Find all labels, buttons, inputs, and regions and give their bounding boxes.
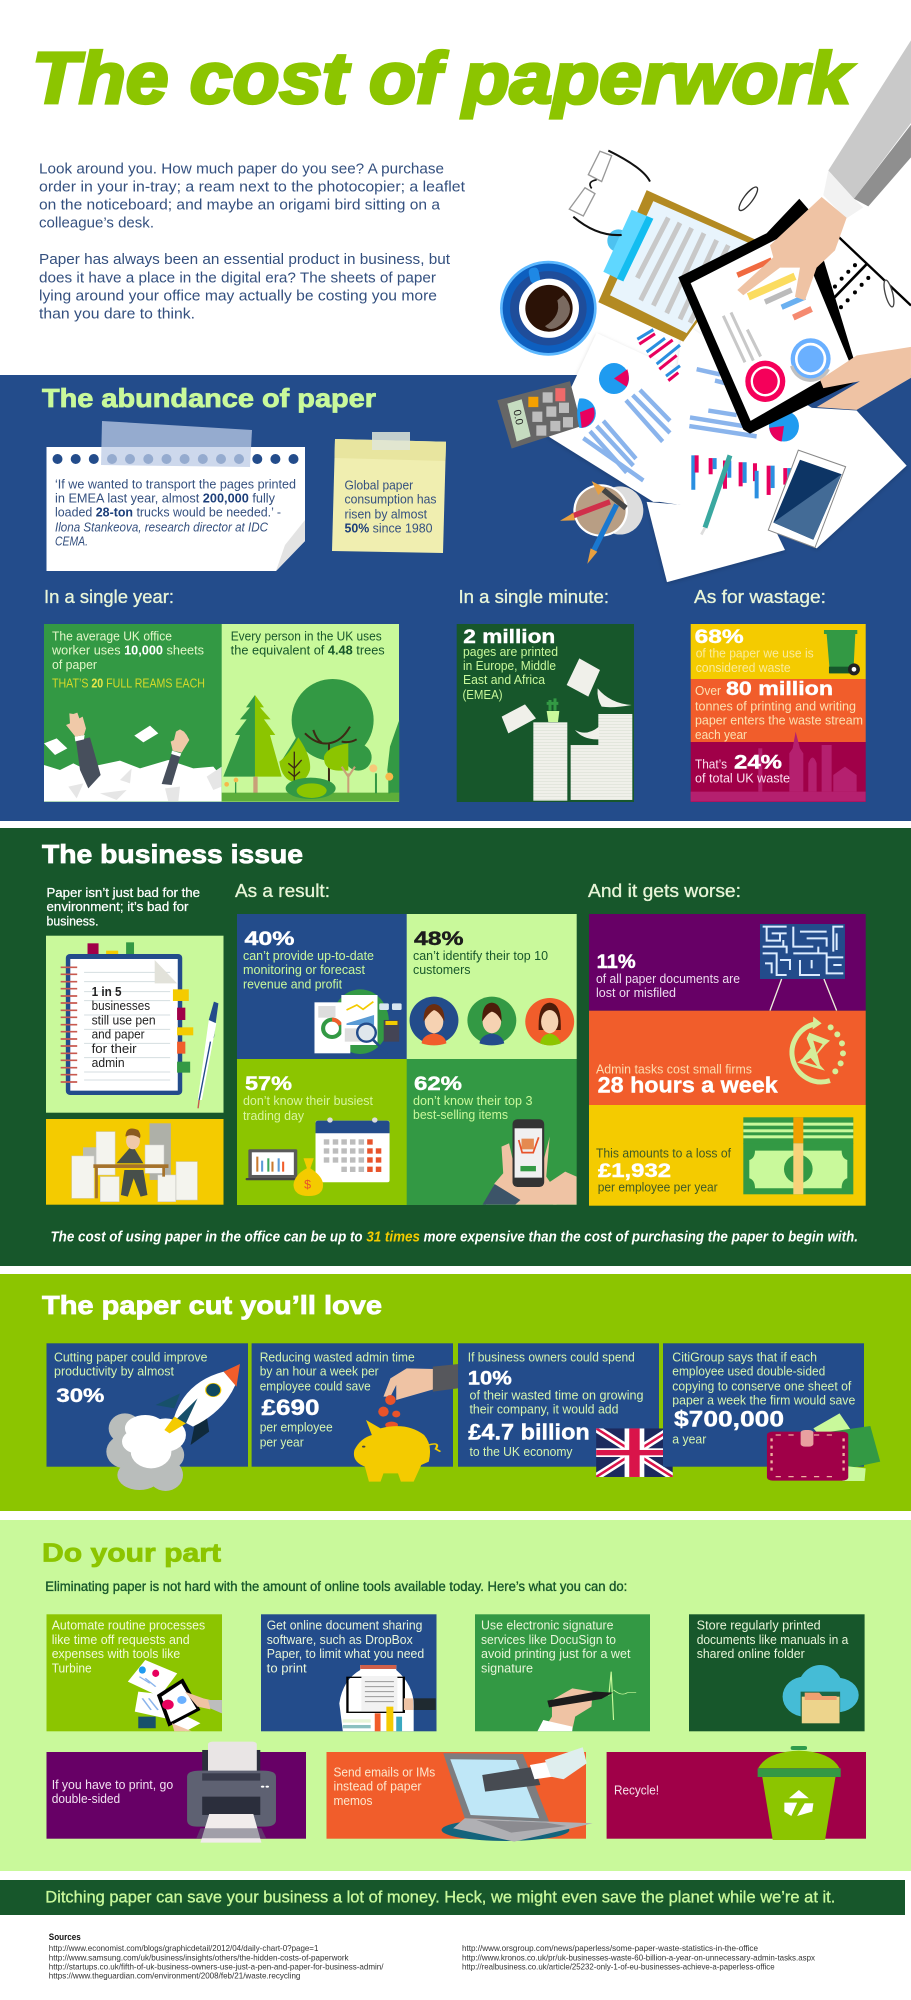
- card text: sheets of paper: worker uses 10,000 sheets: [51, 644, 204, 658]
- panel: admin time card: £690: [262, 1395, 320, 1420]
- icon: banknote bundle: [743, 1117, 853, 1194]
- panel: productivity card: Cutting paper could improve: [54, 1351, 207, 1365]
- panel: automate card: Turbine: [52, 1662, 92, 1676]
- notebook text: [92, 985, 156, 1070]
- banner: closing message: Ditching paper can save your business a lot of money. Heck, we might even save the planet while we’re at it.: [45, 1888, 835, 1907]
- icon: tape: [101, 421, 252, 467]
- panel: CitiGroup card: $700,000: [674, 1407, 784, 1432]
- sources list: Sources: [49, 1932, 81, 1942]
- panel: 62% card: 62%: [414, 1074, 462, 1095]
- panel: shared folder card: documents like manuals in a: [697, 1633, 848, 1647]
- icon: hand dropping coins into piggy bank: [354, 1363, 471, 1482]
- subheading: as a result: As a result:: [235, 881, 330, 901]
- panel: recycle card: Recycle!: [614, 1783, 659, 1797]
- card text: 2 million: in Europe, Middle: [463, 659, 556, 673]
- icon: forest: [222, 679, 399, 802]
- panel: double sided printing card: double-sided: [52, 1792, 120, 1806]
- panel: 57% card: [237, 1059, 407, 1205]
- card text: 2 million: pages are printed: [463, 645, 558, 659]
- panel: CitiGroup card: a year: [672, 1432, 706, 1446]
- sources list: http://www.samsung.com/uk/business/insights/others/the-hidden-costs-of-paperwork: [49, 1952, 349, 1962]
- panel: 11% misfiled card: lost or misfiled: [596, 986, 676, 1000]
- intro text: colleague’s desk.: [39, 215, 154, 232]
- card text: 2 million: [462, 627, 558, 702]
- intro text: does it have a place in the digital era? The sheets of paper: [39, 269, 436, 286]
- icon: hourglass with arrow: [792, 1017, 846, 1082]
- sticky note text: risen by almost: [344, 508, 428, 522]
- panel: 11% misfiled card: of all paper documents are: [596, 972, 740, 986]
- icon: paperclip: [736, 185, 760, 213]
- panel: orange 80 million band: each year: [695, 728, 747, 742]
- panel: 62% card: [407, 1059, 577, 1205]
- card text: 2 million: 2 million: [463, 627, 555, 648]
- panel: productivity card: [46, 1343, 248, 1491]
- card text: 2 million: (EMEA): [462, 688, 502, 702]
- sticky note text: consumption has: [344, 492, 436, 506]
- notebook text: 1 in 5: [92, 985, 122, 999]
- intro text: lying around your office may actually be costing you more: [39, 287, 437, 304]
- callout: 31 times more expensive: The cost of using paper in the office can be up to 31 times more expensive than the cost of purchasing the paper to begin with.: [50, 1230, 858, 1246]
- panel: CitiGroup card: paper a week the firm would save: [672, 1393, 855, 1407]
- icon: clipboard: [598, 190, 757, 342]
- notebook text: businesses: [92, 999, 150, 1013]
- panel: admin time card: Reducing wasted admin time: [260, 1351, 415, 1365]
- panel: double sided printing card: [46, 1742, 306, 1843]
- panel: 11% misfiled card: 11%: [597, 952, 636, 973]
- intro text: on the noticeboard; and maybe an origami bird sitting on a: [39, 197, 441, 214]
- panel: 40% card: 40%: [244, 929, 295, 950]
- panel: document sharing card: Paper, to limit what you need: [267, 1647, 424, 1661]
- heading: the paper cut you'll love: The paper cut you’ll love: [42, 1290, 382, 1320]
- icon: charts and magnifier: [314, 989, 402, 1054]
- panel: business owners card: £4.7 billion: [468, 1419, 590, 1444]
- notebook text: and paper: [92, 1028, 145, 1042]
- panel: 40% card: revenue and profit: [243, 978, 343, 992]
- icon: desk illustration with papers, tablet, coffee and hands: [497, 40, 911, 582]
- title: The cost of paperwork: [32, 39, 855, 119]
- panel: 40% card: [237, 914, 407, 1059]
- card text: sheets of paper: of paper: [52, 658, 97, 672]
- icon: sticky tape: [372, 432, 410, 450]
- icon: printer: [187, 1742, 276, 1843]
- panel: electronic signature card: services like DocuSign to: [481, 1633, 616, 1647]
- panel: admin time card: employee could save: [260, 1380, 371, 1394]
- panel: 11% misfiled card: [589, 914, 866, 1011]
- icon: calendar laptop and money bag: [246, 1117, 390, 1196]
- panel: orange 80 million band: paper enters the waste stream: [695, 714, 863, 728]
- sticky note text: Global paper: [344, 478, 413, 492]
- panel: 48% card: customers: [413, 963, 470, 977]
- panel: sticky note: [332, 432, 446, 553]
- icon: man at desk among paper stacks: [72, 1123, 197, 1202]
- text: bad for business: business.: [46, 914, 98, 928]
- panel: do your part section background: [0, 1520, 911, 1871]
- panel: 57% card: trading day: [243, 1109, 305, 1123]
- sources list: https://www.theguardian.com/environment/2008/feb/21/waste.recycling: [49, 1971, 301, 1981]
- icon: wallet with banknotes: [767, 1413, 880, 1481]
- panel: productivity card: productivity by almost: [54, 1365, 175, 1379]
- panel: electronic signature card: Use electronic signature: [481, 1618, 614, 1632]
- text: bad for business: Paper isn’t just bad for the: [46, 886, 200, 900]
- icon: union jack flag: [596, 1428, 673, 1477]
- quote text: in EMEA last year, almost 200,000 fully: [55, 492, 276, 506]
- panel: document sharing card: Get online document sharing: [267, 1618, 422, 1632]
- card text: trees: the equivalent of 4.48 trees: [231, 644, 385, 658]
- icon: city silhouette: [691, 732, 866, 802]
- subheading: and it gets worse: And it gets worse:: [588, 881, 741, 901]
- icon: smartphone: [768, 450, 846, 548]
- panel: abundance section background: [0, 375, 911, 821]
- sticky note text: 50% since 1980: [344, 522, 433, 536]
- sticky note text: [344, 478, 436, 536]
- icon: person reading document: [339, 1665, 436, 1731]
- heading: do your part: Do your part: [42, 1538, 221, 1568]
- panel: shared folder card: [689, 1614, 865, 1731]
- panel: 2 million pages card: [457, 624, 634, 802]
- icon: note binding holes: [52, 454, 298, 464]
- notebook text: for their: [92, 1042, 137, 1056]
- panel: admin time card: [252, 1343, 471, 1482]
- panel: automate card: [46, 1614, 222, 1731]
- panel: automate card: like time off requests and: [52, 1633, 190, 1647]
- panel: productivity card: 30%: [56, 1386, 105, 1407]
- banner: closing message: [0, 1880, 905, 1915]
- panel: 40% card: can’t provide up-to-date: [243, 949, 374, 963]
- panel: business owners card: [458, 1343, 673, 1477]
- quote text: [55, 478, 296, 548]
- quote text: loaded 28-ton trucks would be needed.’ -: [55, 506, 281, 520]
- icon: notebook with holes: [813, 237, 911, 374]
- panel: emails card: [326, 1747, 593, 1842]
- heading: the abundance of paper: The abundance of paper: [42, 383, 376, 413]
- card text: sheets of paper: THAT’S 20 FULL REAMS EACH: [52, 677, 205, 691]
- panel: 57% card: 57%: [245, 1074, 292, 1095]
- icon: hand signing with stylus: [537, 1672, 636, 1731]
- panel: document sharing card: [261, 1614, 436, 1731]
- panel: document sharing card: software, such as DropBox: [267, 1633, 413, 1647]
- heading: the business issue: The business issue: [42, 839, 303, 869]
- icon: cloud folder: [783, 1665, 859, 1723]
- panel: automate card: Automate routine processes: [52, 1618, 205, 1632]
- panel: orange 80 million band: [691, 679, 866, 742]
- panel: emails card: Send emails or IMs: [334, 1766, 435, 1780]
- icon: calculator: [497, 381, 582, 448]
- intro text: order in your in-tray; a ream next to the photocopier; a leaflet: [39, 179, 466, 196]
- panel: orange 80 million band: tonnes of printing and writing: [695, 700, 856, 714]
- panel: 28 hours card: [589, 1011, 866, 1105]
- panel: 48% card: [407, 914, 577, 1059]
- panel: business owners card: 10%: [468, 1368, 512, 1389]
- panel: paper cut section background: [0, 1274, 911, 1511]
- panel: CitiGroup card: [663, 1343, 880, 1481]
- panel: crimson 24% band: 24%: [734, 752, 782, 773]
- icon: maze on easel: [760, 924, 845, 1011]
- panel: admin time card: per year: [260, 1436, 304, 1450]
- sources list: http://www.orsgroup.com/news/paperless/some-paper-waste-statistics-in-the-office: [462, 1943, 758, 1953]
- icon: hand with phone shopping cart: [483, 1119, 577, 1205]
- panel: shared folder card: Store regularly printed: [697, 1618, 821, 1632]
- icon: lower hand: [817, 347, 911, 410]
- sources list: http://www.kronos.co.uk/pr/uk-businesses-waste-60-billion-a-year-on-unnecessary-admin-tasks.aspx: [462, 1952, 816, 1962]
- icon: sleeve: [823, 40, 911, 219]
- notebook text: still use pen: [92, 1013, 156, 1027]
- panel: business owners card: their company, it would add: [470, 1403, 619, 1417]
- intro text: than you dare to think.: [39, 305, 195, 322]
- panel: automate card: expenses with tools like: [52, 1647, 180, 1661]
- panel: business owners card: If business owners could spend: [468, 1351, 635, 1365]
- panel: CitiGroup card: CitiGroup says that if each: [672, 1351, 817, 1365]
- panel: white header background: [0, 0, 911, 375]
- panel: £1,932 card: This amounts to a loss of: [596, 1146, 732, 1160]
- icon: tablet: [678, 199, 860, 434]
- icon: recycling bin: [758, 1746, 841, 1840]
- panel: overworked worker card: [46, 1119, 224, 1205]
- notebook text: admin: [92, 1056, 125, 1070]
- icon: pencil cup: [560, 481, 643, 564]
- icon: calculator: 0.0: [510, 409, 525, 426]
- sources list: http://startups.co.uk/fifth-of-uk-business-owners-use-just-a-pen-and-paper-for-business-admin/: [49, 1961, 384, 1971]
- panel: business owners card: of their wasted time on growing: [470, 1388, 644, 1402]
- icon: green wheelie bin: [824, 630, 860, 675]
- quote text: CEMA.: [55, 534, 88, 548]
- panel: trees card: [222, 624, 399, 802]
- icon: paper stacks and flying sheets: [502, 658, 632, 801]
- card text: sheets of paper: [51, 630, 205, 691]
- panel: admin time card: per employee: [260, 1421, 333, 1435]
- panel: £1,932 card: per employee per year: [598, 1181, 718, 1195]
- panel: orange 80 million band: 80 million: [726, 679, 833, 700]
- panel: crimson 24% band: of total UK waste: [695, 772, 790, 786]
- card text: trees: [231, 630, 385, 658]
- panel: 28 hours card: 28 hours a week: [598, 1073, 778, 1098]
- panel: crimson 24% band: [691, 732, 866, 802]
- panel: yellow 68% band: [691, 624, 866, 679]
- panel: 28 hours card: Admin tasks cost small firms: [596, 1062, 752, 1076]
- icon: mini desk papers and tablet: [128, 1660, 222, 1731]
- panel: 57% card: don’t know their busiest: [243, 1094, 374, 1108]
- sources list: http://www.economist.com/blogs/graphicdetail/2012/04/daily-chart-0?page=1: [49, 1943, 319, 1953]
- panel: electronic signature card: signature: [481, 1662, 533, 1676]
- subheading: in a single minute: In a single minute:: [458, 587, 609, 607]
- icon: upper hand: [737, 197, 847, 300]
- intro text: Look around you. How much paper do you see? A purchase: [39, 160, 444, 177]
- panel: wastage card: [691, 624, 866, 802]
- icon: three customer portraits: [410, 997, 574, 1045]
- text: bad for business: environment; it’s bad for: [46, 900, 188, 914]
- text: bad for business: [46, 886, 200, 928]
- icon: laptop sending email: [442, 1747, 593, 1842]
- subheading: in a single year: In a single year:: [44, 587, 174, 607]
- intro: online tools: Eliminating paper is not hard with the amount of online tools available today. Here’s what you can do:: [45, 1579, 627, 1594]
- panel: admin time card: by an hour a week per: [260, 1365, 379, 1379]
- panel: 48% card: can’t identify their top 10: [413, 949, 548, 963]
- panel: business owners card: to the UK economy: [470, 1445, 573, 1459]
- panel: orange 80 million band: Over: [695, 684, 721, 698]
- sources list: [49, 1932, 816, 1981]
- panel: 48% card: 48%: [414, 929, 464, 950]
- card text: 2 million: East and Africa: [463, 673, 545, 687]
- panel: business issue section background: [0, 828, 911, 1266]
- panel: 62% card: best-selling items: [413, 1108, 508, 1122]
- panel: 40% card: monitoring or forecast: [243, 963, 366, 977]
- panel: yellow 68% band: considered waste: [696, 661, 791, 675]
- panel: recycle card: [607, 1746, 866, 1840]
- panel: average office worker card: [44, 624, 222, 802]
- panel: £1,932 card: £1,932: [598, 1161, 671, 1182]
- icon: coffee cup: [500, 261, 597, 356]
- panel: 62% card: don’t know their top 3: [413, 1094, 533, 1108]
- panel: emails card: memos: [334, 1794, 372, 1808]
- icon: spiral notebook: [61, 942, 218, 1108]
- card text: trees: Every person in the UK uses: [231, 630, 382, 644]
- panel: emails card: instead of paper: [334, 1780, 422, 1794]
- icon: calendar laptop and money bag: $: [304, 1177, 311, 1191]
- panel: electronic signature card: avoid printing just for a wet: [481, 1647, 631, 1661]
- sources list: http://realbusiness.co.uk/article/25232-only-1-of-eu-businesses-achieve-a-paperless-office: [462, 1961, 775, 1971]
- panel: shared folder card: shared online folder: [697, 1647, 805, 1661]
- panel: crimson 24% band: That’s: [695, 757, 727, 771]
- chart: bars on paper: [693, 455, 789, 498]
- icon: arms drowning in paper: [44, 713, 222, 802]
- subheading: as for wastage: As for wastage:: [694, 587, 826, 607]
- quote text: Ilona Stankeova, research director at IDC: [55, 520, 269, 534]
- chart: paper pies and blue bars: [577, 330, 799, 480]
- icon: rocket launching from smoke: [106, 1364, 240, 1491]
- panel: document sharing card: to print: [267, 1662, 307, 1676]
- panel: £1,932 card: [589, 1105, 866, 1206]
- icon: glasses: [569, 151, 650, 235]
- panel: CitiGroup card: copying to conserve one sheet of: [672, 1380, 852, 1394]
- panel: quote note: [46, 421, 305, 571]
- panel: yellow 68% band: of the paper we use is: [696, 647, 814, 661]
- panel: electronic signature card: [475, 1614, 650, 1731]
- card text: sheets of paper: The average UK office: [52, 630, 172, 644]
- intro text: Paper has always been an essential product in business, but: [39, 251, 451, 268]
- panel: yellow 68% band: 68%: [695, 627, 744, 648]
- quote text: ‘If we wanted to transport the pages printed: [55, 478, 296, 492]
- panel: CitiGroup card: employee used double-sided: [672, 1365, 825, 1379]
- icon: teal pen: [701, 455, 730, 535]
- icon: loose sheets of paper: [548, 323, 907, 582]
- panel: double sided printing card: If you have to print, go: [52, 1778, 173, 1792]
- intro text: [39, 160, 466, 322]
- panel: notebook card: [46, 936, 224, 1113]
